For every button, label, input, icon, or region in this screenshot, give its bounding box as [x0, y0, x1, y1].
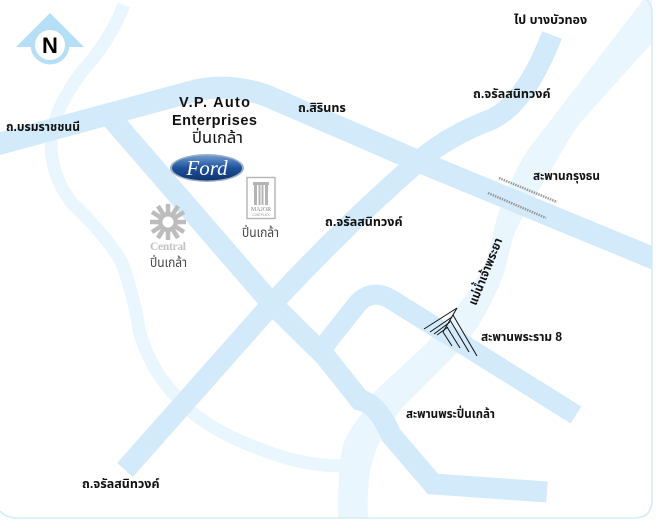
icon: north arrow — [16, 13, 84, 64]
heading: dealer name: ปิ่นเกล้า — [192, 127, 243, 147]
icon: north arrow: N — [42, 33, 58, 58]
icon: Major Cineplex logo — [247, 178, 275, 218]
road labels: ไป บางบัวทอง — [514, 13, 587, 27]
icon: Major Cineplex logo: MAJOR — [251, 207, 271, 213]
icon: Krung Thon bridge — [488, 178, 557, 218]
heading: dealer name: V.P. Auto — [179, 95, 250, 111]
road labels: ถ.จรัลสนิทวงค์ — [473, 87, 551, 101]
heading: dealer name — [172, 95, 257, 147]
icon: Major Cineplex logo: CINEPLEX — [252, 213, 270, 217]
road: Sirindhorn and Borommaratchachonnani — [0, 88, 660, 261]
icon: Ford logo: Ford — [185, 156, 228, 180]
road labels: สะพานพระราม 8 — [481, 330, 562, 344]
road labels: แม่น้ำเจ้าพระยา — [464, 235, 505, 307]
road labels: ถ.สิรินทร — [298, 101, 346, 115]
road labels: สะพานกรุงธน — [533, 169, 600, 183]
road labels: ถ.บรมราชชนนี — [6, 120, 80, 134]
road labels: ถ.จรัลสนิทวงค์ — [82, 477, 160, 491]
icon: Central logo: Central — [150, 241, 186, 253]
road labels: ถ.จรัลสนิทวงค์ — [325, 215, 403, 229]
heading: dealer name: Enterprises — [172, 113, 257, 129]
river: canal on the left — [51, 5, 345, 466]
road: Charansanitwong — [125, 35, 552, 470]
road: Rama 8 approach — [324, 295, 576, 415]
icon: Central logo — [150, 204, 186, 253]
river: Chao Phraya — [338, 0, 660, 518]
icon: Ford logo — [170, 154, 244, 182]
label: Major Pinklao: ปิ่นเกล้า — [242, 224, 279, 240]
road labels: สะพานพระปิ่นเกล้า — [406, 406, 495, 421]
road: lower Charansanitwong — [112, 119, 547, 492]
label: Central Pinklao: ปิ่นเกล้า — [150, 254, 187, 270]
icon: Rama 8 bridge cables — [424, 308, 477, 356]
